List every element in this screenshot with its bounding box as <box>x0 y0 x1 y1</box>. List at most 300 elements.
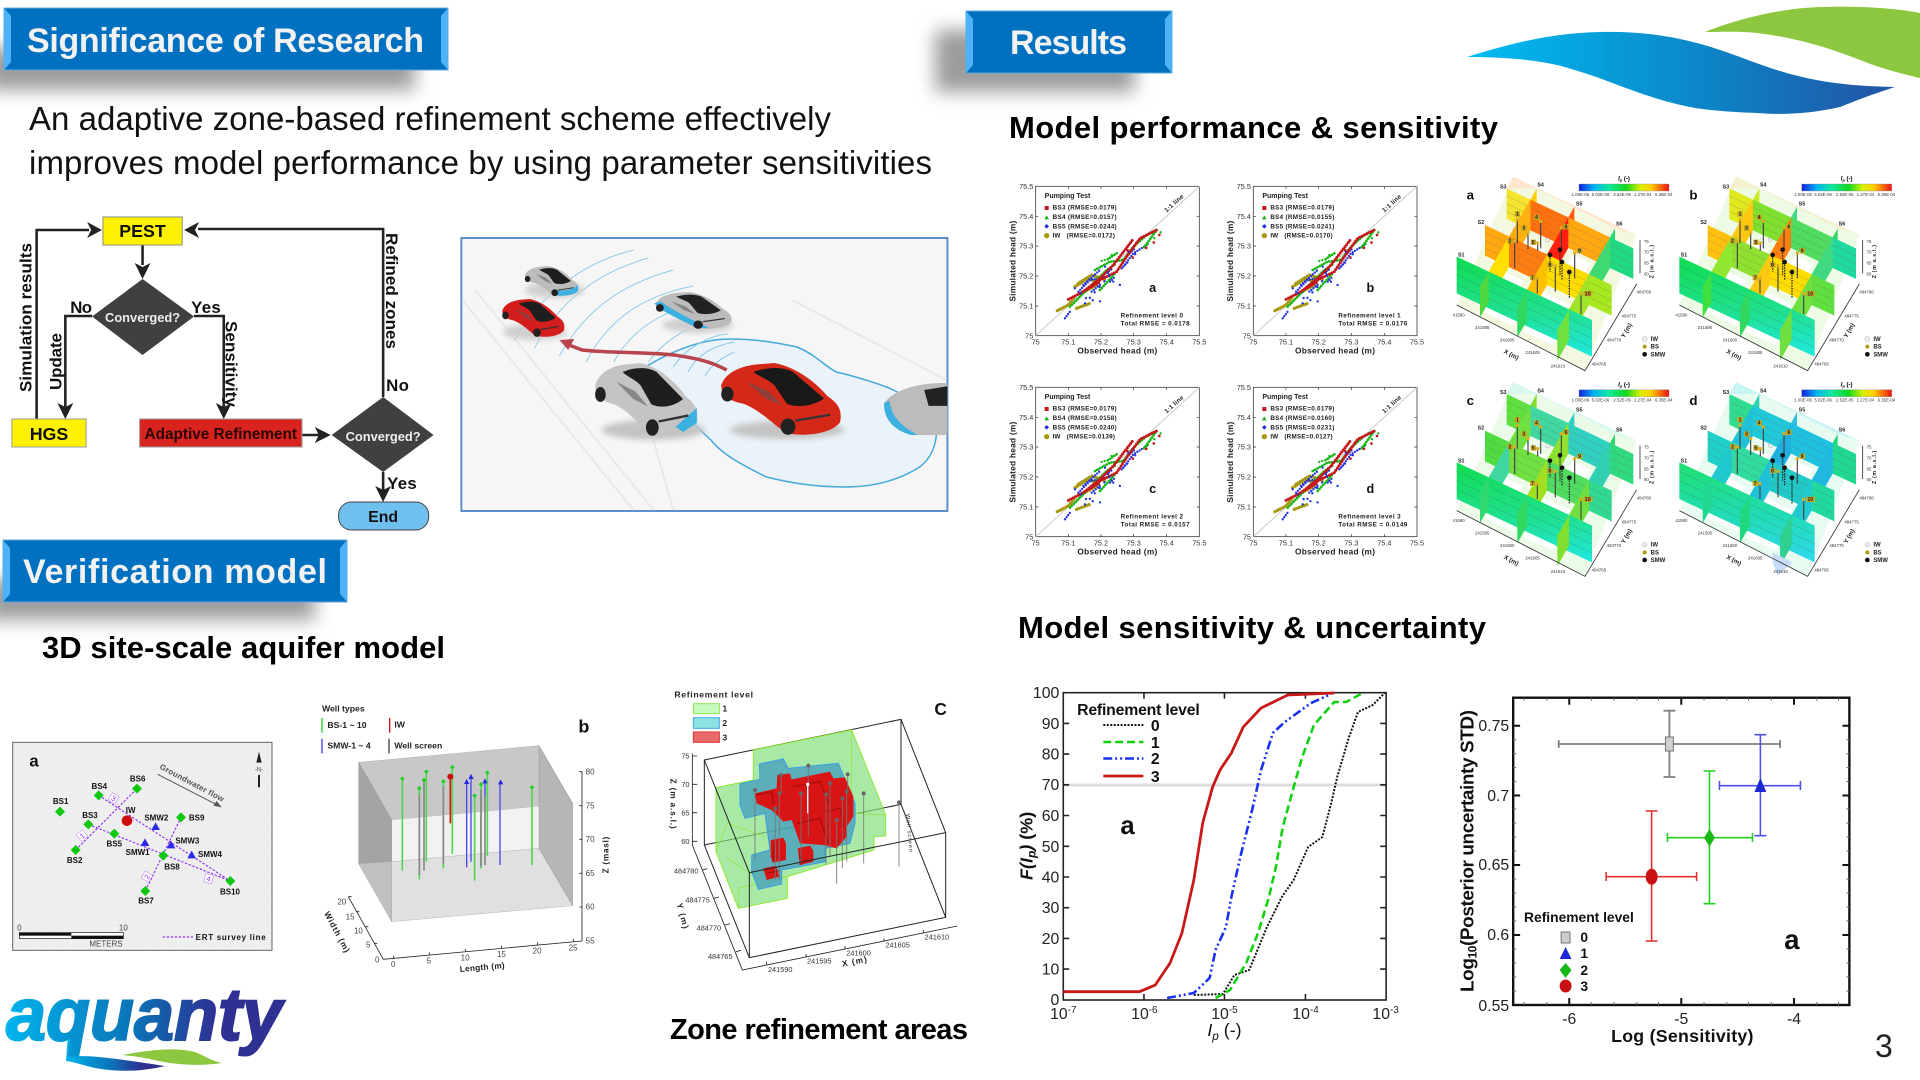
ERT legend: ERT survey line <box>196 933 266 942</box>
axes and labels: X (m) <box>841 954 868 969</box>
intro statement: improves model performance by using parameter sensitivities <box>29 144 932 181</box>
node: converged 2 <box>332 397 434 472</box>
3D panel a: 241610 <box>1551 363 1566 368</box>
3D panel d: 1.00E-06 <box>1794 398 1812 403</box>
3D panel b: 484765 <box>1814 362 1829 367</box>
logo wave top right <box>1467 7 1920 114</box>
scatter panel d: 75.4 <box>1237 413 1251 422</box>
3D panel d <box>1675 382 1896 576</box>
legend: refinement level: 3 <box>1151 769 1160 786</box>
curve: level 0 <box>1194 693 1385 995</box>
flow labels: No <box>70 298 92 317</box>
y tick labels: 80 <box>1042 746 1059 764</box>
3D panel a: Z (m a.s.l.) <box>1649 245 1655 278</box>
3D panel c: S4 <box>1537 388 1544 394</box>
axes: 60 <box>586 903 595 912</box>
3D panel c: 484780 <box>1637 495 1652 500</box>
3D panel d: S6 <box>1839 427 1845 433</box>
axes: 20 <box>533 947 542 956</box>
3D panel a: 75 <box>1644 239 1649 244</box>
scatter panel a: BS5 (RMSE=0.0244) <box>1053 223 1117 230</box>
3D panel c: 484765 <box>1592 567 1607 572</box>
well labels: SMW2 <box>144 813 169 822</box>
3D panel d: (-) <box>1845 382 1853 388</box>
heading: Results <box>966 11 1172 73</box>
3D panel c: BS <box>1651 550 1659 556</box>
node: Adaptive Refinement: Adaptive Refinement <box>145 426 297 443</box>
legend: 2 <box>1580 962 1588 978</box>
legend: 0 <box>1580 929 1588 945</box>
cars <box>502 266 947 440</box>
y tick labels: 40 <box>1042 869 1059 887</box>
axis titles: p <box>1025 851 1039 859</box>
3D panel b: I <box>1841 177 1842 183</box>
3D panel c: 65 <box>1644 466 1649 471</box>
scatter panel b: BS4 (RMSE=0.0155) <box>1270 214 1334 221</box>
scatter panel a: IW <box>1053 233 1060 240</box>
chart: cumulative distribution of Ip: (-) <box>1219 1020 1242 1040</box>
3D panel c: 10 <box>1585 497 1591 503</box>
3D well box b <box>322 704 611 974</box>
3D panel b: S1 <box>1681 253 1687 259</box>
series: level 3 <box>1606 811 1697 941</box>
3D panel b: 241595 <box>1698 325 1713 330</box>
scatter panel a: BS3 (RMSE=0.0179) <box>1053 205 1117 212</box>
ERT line numbers <box>76 793 214 884</box>
scatter panel a <box>1007 182 1206 355</box>
scatter panel c: BS3 (RMSE=0.0179) <box>1053 406 1117 413</box>
y tick labels: 30 <box>1042 900 1059 917</box>
3D panel c: 4 <box>1535 421 1538 427</box>
scatter panel c: BS5 (RMSE=0.0240) <box>1053 424 1117 431</box>
scatter panel b: 1:1 line <box>1381 193 1403 214</box>
node: HGS <box>12 419 86 447</box>
scatter panel b: 75.1 <box>1279 337 1293 346</box>
scatter panel b: BS5 (RMSE=0.0241) <box>1270 223 1334 230</box>
axes: 55 <box>586 937 595 946</box>
3D panel a: 6 <box>1565 224 1568 230</box>
axes: Length (m) <box>459 960 505 974</box>
scale bar: 0 <box>17 924 22 933</box>
well labels: IW <box>126 806 136 815</box>
refinement zones c: C <box>934 699 947 719</box>
flow labels: Update <box>46 333 65 390</box>
axes: Width (m) <box>322 910 352 954</box>
axis titles: F(I <box>1017 858 1037 880</box>
ERT line numbers: 4 <box>205 874 212 884</box>
y tick labels: 0.75 <box>1478 718 1509 735</box>
3D panel b: SMW <box>1873 352 1888 358</box>
flow labels: Refined zones <box>382 233 401 349</box>
3D panel b: IW <box>1873 337 1881 343</box>
well legend: Well types <box>322 704 365 714</box>
3D panel b: 4 <box>1758 215 1761 221</box>
3D panel c: 2 <box>1508 444 1511 450</box>
3D panel a: 4 <box>1535 215 1538 221</box>
3D panel a: S4 <box>1537 183 1544 189</box>
scatter panel c: 75.1 <box>1019 503 1033 512</box>
scatter panel b: 75.5 <box>1410 337 1424 346</box>
scatter panel b: 75.3 <box>1344 337 1358 346</box>
flow labels: Simulation results <box>17 243 36 392</box>
level 3 zone <box>755 772 853 880</box>
3D panel c: X (m) <box>1502 554 1520 568</box>
3D panel a: I <box>1618 177 1620 183</box>
scatter panel b: b <box>1366 281 1374 295</box>
scatter panel d <box>1225 383 1424 556</box>
scatter panel a: 75 <box>1032 337 1040 346</box>
node: PEST <box>103 217 182 245</box>
refinement legend: 3 <box>722 733 727 743</box>
curve: level 3 <box>1063 693 1334 992</box>
flow labels <box>17 233 417 493</box>
site map a: a <box>29 752 39 771</box>
scatter panel b: 75.2 <box>1237 272 1251 281</box>
chart: cumulative distribution of Ip <box>1017 685 1399 1043</box>
scatter panel c: 75.5 <box>1192 538 1206 547</box>
3D panel d: 484770 <box>1829 543 1844 548</box>
scatter panel d: 75.2 <box>1237 473 1251 482</box>
3D panel b: 5.02E-06 <box>1814 192 1832 197</box>
scatter panel d: 75.1 <box>1237 503 1251 512</box>
scatter panel d: Total RMSE = 0.0149 <box>1338 522 1408 529</box>
scatter panel d: 75.2 <box>1312 538 1326 547</box>
axes: 80 <box>586 767 595 776</box>
3D panel a: 9 <box>1578 248 1581 254</box>
3D panel a: (-) <box>1622 177 1630 183</box>
3D panel a: S5 <box>1576 202 1583 208</box>
scatter panel b <box>1225 182 1424 355</box>
scatter panel a: 1:1 line <box>1163 193 1186 214</box>
3D panel b: 70 <box>1867 250 1872 255</box>
flow labels: Yes <box>191 298 221 317</box>
panel letter: a <box>1784 924 1800 955</box>
axis titles: 10 <box>1466 945 1480 958</box>
well labels: BS2 <box>67 856 83 865</box>
y tick labels <box>1033 685 1059 1009</box>
3D panel b: 241610 <box>1773 363 1788 368</box>
axes and labels: 484770 <box>697 924 721 933</box>
3D panel c: 6.35E-04 <box>1655 398 1673 403</box>
3D panel d: 3 <box>1745 431 1748 437</box>
3D panel b: 1 <box>1739 212 1742 218</box>
scatter panel c: 75.1 <box>1061 538 1075 547</box>
aquifer box <box>359 746 573 922</box>
3D panel c: Y (m) <box>1620 528 1634 545</box>
scatter panel a: 75.5 <box>1192 337 1206 346</box>
x tick labels: -4 <box>1787 1011 1801 1028</box>
3D panel c: (-) <box>1622 382 1630 388</box>
axes and labels: 241590 <box>768 965 792 974</box>
y tick labels: 20 <box>1042 931 1059 948</box>
3D panel b: 8 <box>1771 263 1774 269</box>
scatter panel d: (RMSE=0.0127) <box>1284 434 1333 441</box>
3D panel d: d <box>1689 393 1697 408</box>
heading: Verification model: Verification model <box>23 553 327 591</box>
well legend: IW <box>394 719 406 729</box>
series: level 1 <box>1719 735 1800 836</box>
3D panel b: S2 <box>1700 220 1707 226</box>
well: IW marker <box>122 815 132 826</box>
3D panel c: IW <box>1651 543 1658 549</box>
3D panel b: Y (m) <box>1843 322 1857 339</box>
3D panel b: 2 <box>1731 239 1734 245</box>
3D panel a: 70 <box>1644 250 1649 255</box>
legend: refinement level: Refinement level <box>1077 702 1200 719</box>
north arrow: -N- <box>255 767 263 773</box>
scatter panel c <box>1007 383 1206 556</box>
scatter panel d: 75.5 <box>1410 538 1424 547</box>
subheading: 3D site-scale aquifer model: 3D site-scale aquifer model <box>42 630 445 665</box>
scatter panel c: 75.2 <box>1094 538 1108 547</box>
3D panel d: 1 <box>1739 417 1742 423</box>
3D panel c: 484775 <box>1622 519 1637 524</box>
3D panel c: 8 <box>1548 468 1551 474</box>
3D panel c: c <box>1467 393 1475 408</box>
3D panel d: 7 <box>1754 481 1757 487</box>
scatter panel a: Refinement level 0 <box>1121 312 1183 319</box>
3D panel b: X (m) <box>1725 348 1742 362</box>
y tick labels: 60 <box>1042 808 1059 825</box>
site map a <box>13 742 272 950</box>
3D panel d: 2 <box>1731 444 1734 450</box>
axes and labels: 60 <box>681 837 689 846</box>
3D panel d: 8 <box>1771 468 1774 474</box>
3D panel b: b <box>1689 187 1697 202</box>
3D panel a: Y (m) <box>1620 322 1634 339</box>
well labels: BS4 <box>92 782 108 791</box>
3D panel a: IW <box>1651 337 1658 343</box>
scatter panel b: 75.3 <box>1237 242 1251 251</box>
sensor arcs <box>515 250 735 376</box>
wells <box>400 765 534 881</box>
axes: 5 <box>427 957 432 966</box>
axes and labels <box>669 752 957 974</box>
3D panel d: 241595 <box>1698 531 1713 536</box>
3D panel d: 6 <box>1787 430 1790 436</box>
scatter panel c: Observed head (m) <box>1077 546 1158 556</box>
3D panel b: 6.35E-04 <box>1878 192 1896 197</box>
y tick labels: 0.65 <box>1478 857 1509 874</box>
3D panel a: S1 <box>1458 253 1465 259</box>
well labels <box>53 775 241 905</box>
3D panel d: 6.35E-04 <box>1878 398 1896 403</box>
scatter panel c: 75 <box>1025 532 1033 541</box>
header shadow: results <box>935 30 1135 92</box>
3D panel d: S3 <box>1723 390 1729 396</box>
3D panel a: S6 <box>1616 222 1623 228</box>
ERT line numbers: 1 <box>78 831 87 841</box>
x tick labels: -7 <box>1068 1005 1077 1016</box>
axes and labels: Z (m a.s.l.) <box>669 779 679 829</box>
flow labels: Sensitivity <box>222 321 241 408</box>
ERT legend <box>163 933 266 942</box>
x tick labels <box>1050 1005 1399 1023</box>
well labels: BS7 <box>138 896 154 905</box>
axis titles: (%) <box>1017 812 1037 840</box>
scatter panel a: 75.4 <box>1019 212 1033 221</box>
3D panel d: 241600 <box>1723 543 1738 548</box>
3D panel a: 60 <box>1644 271 1649 276</box>
axes: 70 <box>586 835 595 844</box>
refinement legend: 1 <box>722 704 727 714</box>
3D panel c: 484770 <box>1607 543 1622 548</box>
3D panel c: 1.00E-06 <box>1572 398 1590 403</box>
3D panel b: 65 <box>1867 261 1872 266</box>
header shadow: verification <box>0 580 315 620</box>
subheading: Model sensitivity and uncertainty: Model sensitivity & uncertainty <box>1018 610 1487 645</box>
well labels: SMW3 <box>175 837 200 846</box>
3D panel d: 484765 <box>1814 567 1829 572</box>
refinement zones c <box>669 689 957 974</box>
3D panel b: 1.00E-06 <box>1794 192 1812 197</box>
y tick labels: 90 <box>1042 716 1059 733</box>
y tick labels: 0.55 <box>1478 998 1509 1015</box>
flow labels: Yes <box>387 474 417 493</box>
scatter panel a: BS4 (RMSE=0.0157) <box>1053 214 1117 221</box>
y tick labels: 0.6 <box>1487 927 1509 944</box>
ERT line numbers: 2 <box>142 873 152 881</box>
3D panel a: 241600 <box>1500 337 1515 342</box>
scatter panel b: Simulated head (m) <box>1225 220 1235 302</box>
3D panel c: 75 <box>1644 445 1649 450</box>
3D panel d: Y (m) <box>1843 528 1857 545</box>
3D panel c: 60 <box>1644 477 1649 482</box>
3D panel a: 7 <box>1531 275 1534 281</box>
3D panel c: 241605 <box>1525 556 1540 561</box>
axes and labels: 484765 <box>708 952 732 961</box>
3D panel a: 10 <box>1585 291 1591 297</box>
3D panel a: 484770 <box>1607 337 1622 342</box>
scatter panel d: 75 <box>1249 538 1257 547</box>
axes and labels: 241605 <box>885 941 910 950</box>
3D panel c: I <box>1618 382 1620 388</box>
3D panel b: BS <box>1873 345 1882 351</box>
3D panel c: S2 <box>1478 426 1484 432</box>
3D panel c: S5 <box>1576 407 1583 413</box>
axes: 5 <box>366 941 371 950</box>
3D panel a: 1 <box>1516 212 1519 218</box>
3D panel a <box>1453 177 1673 371</box>
3D panel a: X (m) <box>1502 348 1520 362</box>
3D panel a: 484775 <box>1622 314 1637 319</box>
3D panel d: 75 <box>1867 445 1872 450</box>
refinement legend: 2 <box>722 718 727 728</box>
3D panel c: 1.27E-04 <box>1634 398 1652 403</box>
axes: 10 <box>354 927 363 936</box>
refinement legend <box>674 689 753 743</box>
scatter panel c: IW <box>1053 434 1060 441</box>
scatter panel d: 75.3 <box>1237 443 1251 452</box>
3D panel d: BS <box>1873 550 1882 556</box>
node: End <box>339 502 429 530</box>
well labels: BS6 <box>130 775 146 784</box>
3D panel b: 41590 <box>1675 312 1688 317</box>
y tick labels: 50 <box>1042 839 1059 856</box>
3D panel b: S3 <box>1723 184 1729 190</box>
well legend <box>322 704 442 753</box>
heading: Significance of Research: Significance of Research <box>27 22 424 60</box>
3D panel d: 9 <box>1801 454 1804 460</box>
scatter panel c: c <box>1149 482 1156 496</box>
3D panel a: 1.27E-04 <box>1634 192 1652 197</box>
3D panel a: S3 <box>1500 184 1507 190</box>
subheading: Model performance and sensitivity: Model performance & sensitivity <box>1009 110 1499 145</box>
heading: Verification model <box>3 540 347 602</box>
scatter panel d: 75.1 <box>1279 538 1293 547</box>
scatter panel b: Total RMSE = 0.0176 <box>1338 321 1408 328</box>
3D panel c: 3 <box>1522 431 1525 437</box>
3D panel b: 2.52E-05 <box>1836 192 1854 197</box>
scatter panel d: 1:1 line <box>1381 394 1403 415</box>
3D panel a: 3 <box>1522 226 1525 232</box>
ERT survey lines <box>76 789 230 891</box>
3D panel a: a <box>1467 187 1475 202</box>
scatter panel c: Simulated head (m) <box>1007 421 1017 503</box>
3D panel d: I <box>1841 382 1842 388</box>
scatter panel d: 75.5 <box>1237 383 1251 392</box>
scatter panel a: Observed head (m) <box>1077 345 1158 355</box>
well labels: BS8 <box>164 863 180 872</box>
scatter panel c: 75.4 <box>1019 413 1033 422</box>
y tick labels: 70 <box>1042 777 1059 794</box>
node: converged 2: Converged? <box>346 429 421 444</box>
node: HGS: HGS <box>30 424 68 444</box>
3D panel b: 6 <box>1787 224 1790 230</box>
scatter panel a: 75.1 <box>1061 337 1075 346</box>
legend: refinement level: 0 <box>1151 718 1160 735</box>
axes: 75 <box>586 801 595 810</box>
3D panel b: S4 <box>1760 183 1767 189</box>
3D panel a: 5.02E-06 <box>1592 192 1610 197</box>
logo: aquanty: aquanty <box>6 973 286 1056</box>
3D panel c: 241610 <box>1551 569 1566 574</box>
3D panel b: 484775 <box>1844 314 1859 319</box>
3D panel c: p <box>1619 383 1623 388</box>
chart: cumulative distribution of Ip: I <box>1207 1020 1212 1040</box>
3D panel c: 1 <box>1516 417 1519 423</box>
3D panel d: 65 <box>1867 466 1872 471</box>
scatter panel d: Simulated head (m) <box>1225 421 1235 503</box>
3D panel c: 70 <box>1644 455 1649 460</box>
3D panel c: 241600 <box>1500 543 1515 548</box>
3D panel a: 41590 <box>1453 312 1465 317</box>
level 2 zone <box>740 759 855 889</box>
3D panel c: Z (m a.s.l.) <box>1649 450 1655 484</box>
axes and labels: 484775 <box>685 895 710 904</box>
scatter panel c: 75.4 <box>1160 538 1174 547</box>
x tick labels: 10 <box>1211 1006 1229 1023</box>
well labels: BS10 <box>220 888 241 897</box>
node: End: End <box>368 509 398 526</box>
scatter panel c: 75.5 <box>1019 383 1033 392</box>
scatter panel c: 75 <box>1032 538 1040 547</box>
scatter panel d: 75.4 <box>1377 538 1391 547</box>
scatter panel b: BS3 (RMSE=0.0179) <box>1270 205 1334 212</box>
refinement legend: Refinement level <box>674 689 753 699</box>
intro statement <box>29 100 932 181</box>
axes: 25 <box>569 943 578 952</box>
front wireframe <box>704 719 946 958</box>
scatter panel c: 1:1 line <box>1163 394 1186 415</box>
y tick labels: 0.7 <box>1487 788 1509 805</box>
3D panel b: 9 <box>1801 248 1804 254</box>
scatter panel a: a <box>1149 281 1157 295</box>
3D panel a: 1.00E-06 <box>1572 192 1590 197</box>
axes <box>322 767 611 974</box>
scatter panel b: 75.4 <box>1237 212 1251 221</box>
node: Adaptive Refinement <box>140 419 302 447</box>
